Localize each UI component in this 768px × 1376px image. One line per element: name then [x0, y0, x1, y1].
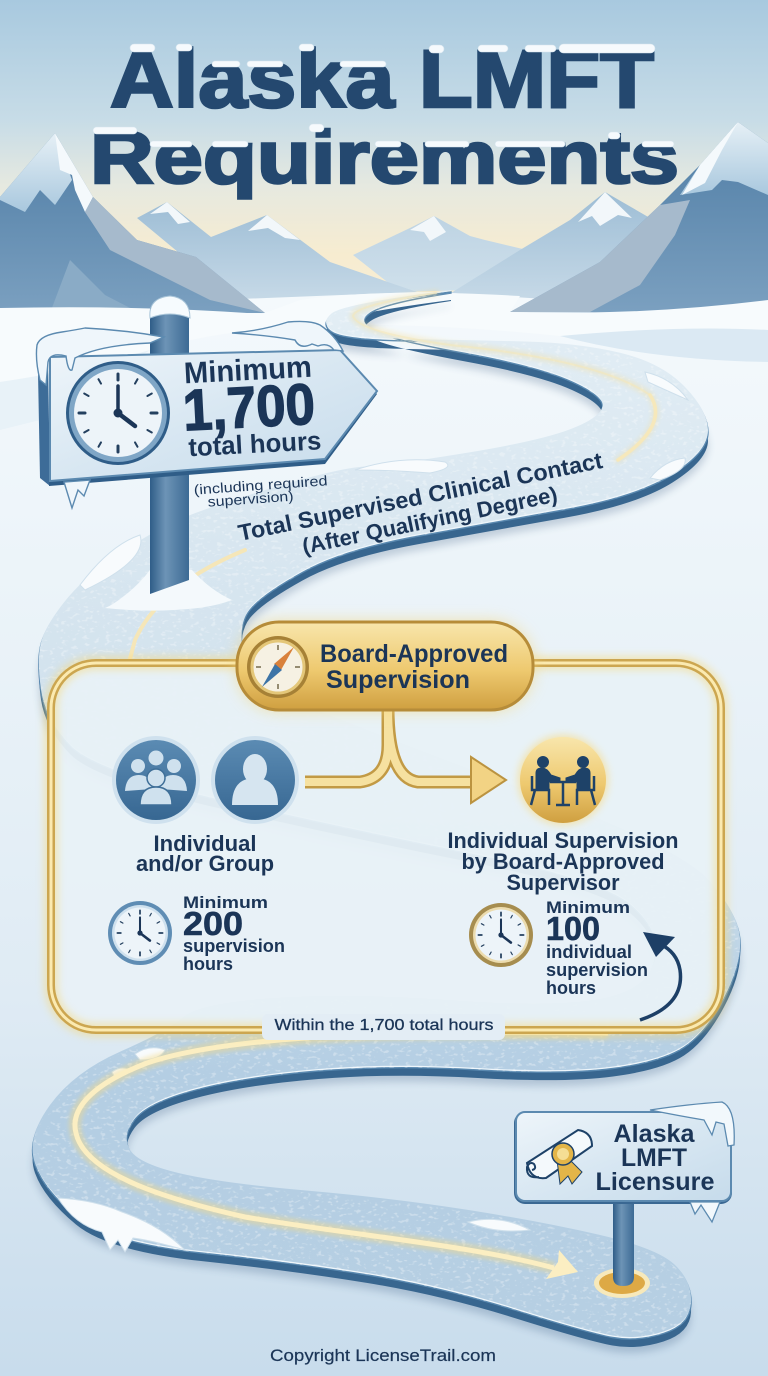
sign text	[180, 350, 322, 462]
individual supervision label	[448, 828, 678, 895]
group supervision label	[136, 831, 274, 876]
road glowing centre line upper	[127, 293, 656, 670]
title	[90, 34, 679, 199]
icon: diploma	[527, 1130, 592, 1184]
within the total hours caption: Within the 1,700 total hours	[274, 1017, 494, 1034]
connector arrow	[305, 708, 506, 803]
sign post	[105, 296, 232, 611]
starting signpost	[36, 296, 377, 611]
gold ring	[594, 1268, 650, 1298]
icon: group circle	[112, 736, 200, 824]
title snow	[93, 44, 674, 147]
pill heading text	[320, 640, 508, 694]
icon: clock 100	[469, 903, 533, 967]
200 hours text: hours	[183, 954, 233, 974]
sky background	[0, 0, 768, 300]
sign text	[596, 1120, 715, 1196]
100 hours text: individual	[546, 942, 632, 962]
icon: individual circle	[211, 736, 299, 824]
sign snow cap	[36, 321, 343, 508]
100 hours text: 100	[546, 910, 600, 947]
road snow drifts	[58, 372, 688, 1252]
sign text: Minimum	[183, 351, 313, 390]
100 hours text: supervision	[546, 960, 648, 980]
group supervision label: and/or Group	[136, 851, 274, 876]
board	[514, 1112, 732, 1204]
sign text: LMFT	[621, 1144, 687, 1172]
200 hours text: supervision	[183, 936, 285, 956]
snow cap	[650, 1102, 734, 1222]
winding icy road	[33, 290, 740, 1353]
title: Alaska LMFT	[110, 34, 654, 125]
road glowing arrow to licensure	[75, 1032, 608, 1279]
copyright: Copyright LicenseTrail.com	[270, 1346, 496, 1365]
clock icon	[66, 361, 170, 465]
group supervision label: Individual	[154, 831, 256, 856]
icon: clock 200	[108, 901, 172, 965]
snow foreground hills	[0, 293, 768, 430]
title: Requirements	[90, 116, 679, 199]
pill heading text: Board-Approved	[320, 640, 508, 668]
sign text: Licensure	[596, 1168, 715, 1196]
curved arrow	[640, 932, 680, 1020]
200 hours text: 200	[183, 905, 243, 942]
icon: compass	[247, 636, 309, 698]
pill heading text: Supervision	[326, 666, 470, 694]
within the total hours caption	[262, 1014, 505, 1040]
including supervision note	[193, 472, 329, 511]
supervision panel	[51, 622, 721, 1040]
200 hours text: Minimum	[183, 893, 268, 912]
100 hours text: Minimum	[546, 898, 630, 917]
ground snowfield	[0, 292, 768, 1376]
distant mountains	[137, 192, 650, 300]
icon: supervisor meeting circle	[518, 735, 608, 825]
individual supervision label: by Board-Approved	[462, 849, 664, 874]
right mountain	[510, 122, 768, 313]
arrow sign board	[38, 350, 377, 486]
heading pill	[237, 622, 533, 710]
road label: Total Supervised Clinical Contact	[236, 447, 605, 546]
road label: (After Qualifying Degree)	[300, 482, 560, 559]
left mountain	[0, 133, 265, 313]
destination sign	[514, 1102, 734, 1298]
100 hours text: hours	[546, 978, 596, 998]
post	[613, 1200, 634, 1286]
including supervision note: supervision)	[207, 488, 294, 510]
200 hours text	[183, 893, 285, 974]
sign text: Alaska	[614, 1120, 696, 1148]
individual supervision label: Individual Supervision	[448, 828, 678, 853]
100 hours text	[546, 898, 648, 998]
sign text: 1,700	[181, 372, 316, 443]
sign text: total hours	[188, 425, 322, 462]
including supervision note: (including required	[193, 472, 328, 498]
individual supervision label: Supervisor	[506, 870, 620, 895]
